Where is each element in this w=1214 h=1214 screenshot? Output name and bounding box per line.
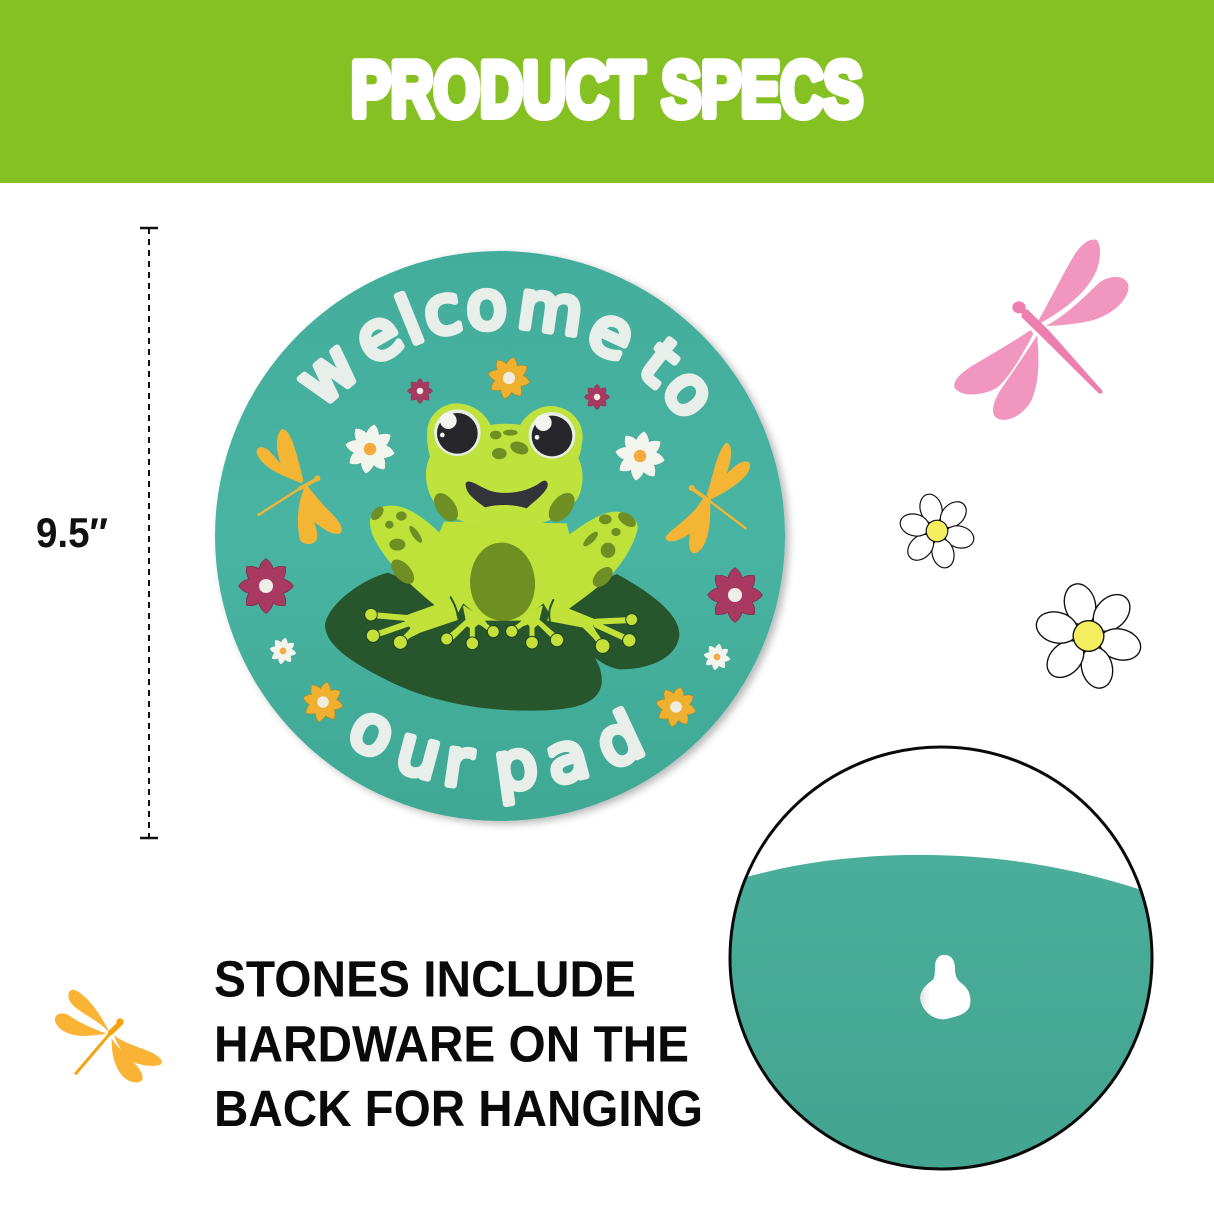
icon: pink dragonfly <box>954 239 1128 420</box>
stone text: welcome to: welcome to <box>282 266 732 432</box>
header banner <box>0 0 1214 183</box>
frog head <box>426 403 583 528</box>
keyhole <box>920 955 970 1019</box>
icon: large daisy <box>1022 570 1155 702</box>
product: round frog stepping stone <box>215 251 785 821</box>
frog toes <box>365 608 638 653</box>
icon: small daisy <box>890 485 984 577</box>
frog on lily pad <box>325 403 679 711</box>
stone text: our pad: our pad <box>338 688 655 807</box>
stone dragonfly left <box>257 429 342 544</box>
frog mouth <box>466 481 548 508</box>
lily pad <box>325 573 679 711</box>
dimension line <box>140 228 158 838</box>
back of stone <box>732 854 1150 1168</box>
frog body and legs <box>370 506 638 621</box>
inset ring <box>730 747 1152 1169</box>
callout text: HARDWARE ON THE <box>214 1016 689 1072</box>
callout text <box>214 950 703 1137</box>
frog spots <box>369 430 638 591</box>
stone flowers <box>239 353 762 731</box>
frog eyes <box>434 409 575 459</box>
title: PRODUCT SPECS <box>351 45 863 133</box>
frog leg creases <box>451 597 553 622</box>
frog feet <box>372 600 632 646</box>
inset: hanging hardware detail <box>720 747 1170 1180</box>
callout text: STONES INCLUDE <box>214 950 636 1008</box>
stone disc <box>215 251 785 821</box>
frog belly <box>470 543 535 621</box>
stone dragonfly right <box>666 443 750 553</box>
icon: orange dragonfly <box>55 990 162 1082</box>
callout text: BACK FOR HANGING <box>214 1080 703 1137</box>
dimension label: 9.5″ <box>36 509 108 556</box>
